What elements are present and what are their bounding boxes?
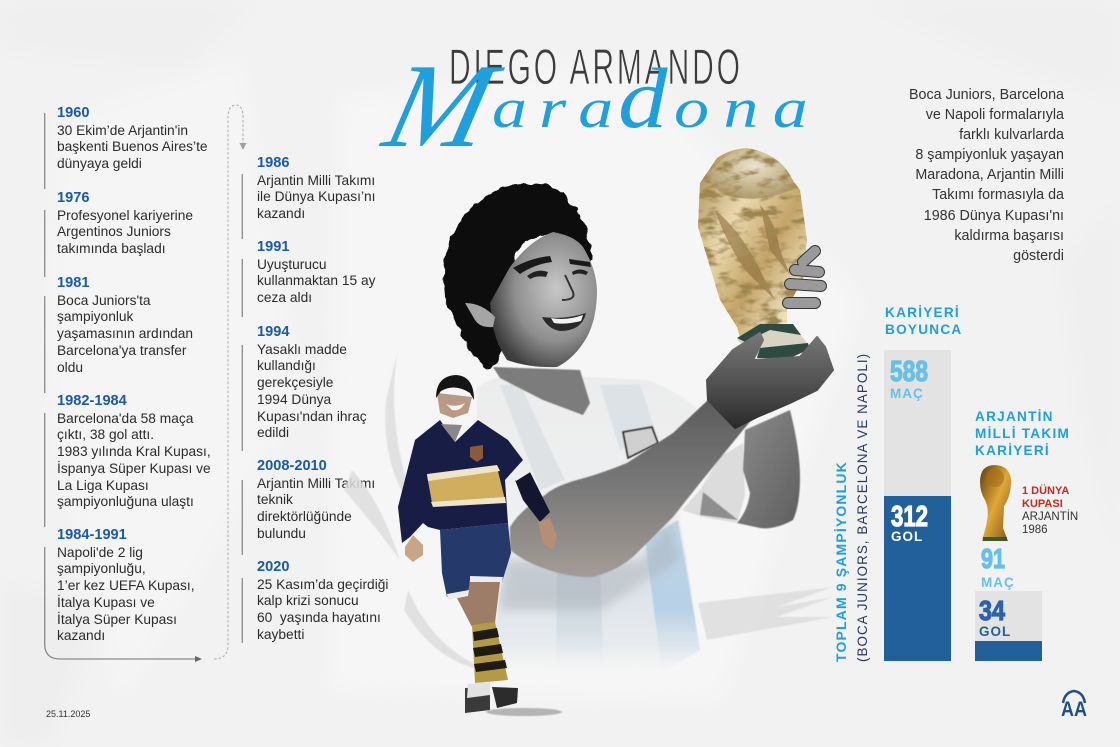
shadow bbox=[486, 708, 562, 716]
intro paragraph: Maradona, Arjantin Milli bbox=[915, 167, 1064, 183]
event 1994: kullandığı bbox=[257, 358, 316, 373]
value: 91 matches bbox=[981, 545, 1015, 590]
event 2008-2010: bulundu bbox=[257, 526, 306, 541]
vertical heading: total championships: TOPLAM 9 ŞAMPİYONLUK bbox=[833, 461, 849, 662]
big figure: hand bbox=[707, 333, 833, 428]
event 1981: Barcelona'ya transfer bbox=[57, 343, 186, 358]
event 1984-1991 bbox=[57, 527, 195, 643]
event 1976: 1976 bbox=[57, 190, 89, 206]
event 1982-1984 bbox=[57, 393, 211, 509]
event 2020: 60 yaşında hayatını bbox=[257, 610, 381, 625]
intro paragraph: Takımı formasıyla da bbox=[932, 187, 1064, 203]
value: 312 goals: GOL bbox=[891, 529, 923, 544]
big figure: far arm bbox=[682, 410, 800, 528]
title bbox=[371, 40, 808, 160]
event 1982-1984: Barcelona'da 58 maça bbox=[57, 410, 193, 426]
bar chart: national team totals bbox=[975, 591, 1042, 661]
event 1960 bbox=[57, 105, 208, 171]
event 1991: ceza aldı bbox=[257, 290, 312, 305]
event 2020: 2020 bbox=[257, 559, 289, 575]
timeline: right column bbox=[257, 155, 388, 642]
event 1982-1984: şampiyonluğuna ulaştı bbox=[57, 494, 194, 509]
intro paragraph: farklı kulvarlarda bbox=[959, 127, 1064, 143]
event 1981: şampiyonluk bbox=[57, 309, 133, 324]
intro paragraph: gösterdi bbox=[1013, 248, 1064, 264]
event 1976: Argentinos Juniors bbox=[57, 224, 171, 239]
intro paragraph: 8 şampiyonluk yaşayan bbox=[915, 147, 1064, 163]
event 1984-1991: 1’er kez UEFA Kupası, bbox=[57, 578, 195, 593]
event 2020: kaybetti bbox=[257, 627, 304, 642]
sock bbox=[472, 622, 508, 683]
event 1994: edildi bbox=[257, 425, 289, 440]
bar chart: career totals bbox=[884, 350, 951, 661]
event 1994: Kupası'ndan ihraç bbox=[257, 408, 367, 424]
event 1976: takımında başladı bbox=[57, 241, 166, 256]
boots bbox=[465, 687, 490, 713]
face bbox=[490, 232, 597, 367]
heading: career: BOYUNCA bbox=[885, 322, 962, 337]
event 1986 bbox=[257, 155, 375, 221]
event 1982-1984: İspanya Süper Kupası ve bbox=[57, 461, 211, 476]
big figure: fingers bbox=[788, 251, 821, 303]
event 1981: oldu bbox=[57, 360, 83, 374]
event 1984-1991: İtalya Süper Kupası bbox=[57, 612, 177, 626]
heading: national team career: KARİYERİ bbox=[975, 443, 1050, 458]
photo composite: Maradona with World Cup trophy bbox=[344, 148, 834, 716]
event 2020 bbox=[257, 559, 388, 642]
value: 312 goals: 312 bbox=[891, 501, 928, 533]
event 1984-1991: kazandı bbox=[57, 628, 105, 643]
leg bbox=[457, 582, 500, 627]
value: 588 matches: 588 bbox=[890, 356, 928, 388]
event 1991 bbox=[257, 239, 376, 305]
value: 588 matches: MAÇ bbox=[890, 386, 924, 401]
event 1986: kazandı bbox=[257, 206, 305, 221]
value: 34 goals: 34 bbox=[979, 595, 1005, 626]
event 1984-1991: 1984-1991 bbox=[57, 527, 127, 543]
event 2008-2010 bbox=[257, 458, 375, 541]
vertical subheading: clubs: (BOCA JUNIORS, BARCELONA VE NAPOLI) bbox=[855, 353, 870, 662]
event 1994: Yasaklı madde bbox=[257, 342, 347, 356]
arms bbox=[515, 472, 550, 522]
nose bbox=[562, 275, 574, 300]
title line: Maradona bbox=[371, 40, 808, 173]
event 1960: 1960 bbox=[57, 105, 89, 121]
trophy base bbox=[737, 324, 810, 358]
big figure: shirt bbox=[477, 377, 700, 675]
intro paragraph: ve Napoli formalarıyla bbox=[926, 107, 1064, 123]
event 2008-2010: Arjantin Milli Takımı bbox=[257, 476, 375, 490]
heading: national team career: MİLLİ TAKIM bbox=[975, 426, 1070, 441]
event 1986: Arjantin Milli Takımı bbox=[257, 172, 375, 188]
event 1991: 1991 bbox=[257, 239, 289, 255]
jersey bbox=[398, 420, 523, 543]
small figure: Boca player bbox=[398, 375, 562, 716]
event 1976: Profesyonel kariyerine bbox=[57, 208, 193, 222]
bar segment: 312 goals bbox=[884, 496, 951, 661]
event 2008-2010: teknik bbox=[257, 492, 293, 507]
shadow under arm bbox=[500, 520, 680, 610]
big figure: head bbox=[447, 186, 597, 367]
event 1986: 1986 bbox=[257, 155, 289, 171]
callout: 1 World Cup bbox=[1022, 484, 1078, 536]
event 1981: 1981 bbox=[57, 275, 89, 291]
value: 588 matches bbox=[890, 356, 928, 401]
intro paragraph: kaldırma başarısı bbox=[954, 228, 1064, 244]
heading: national team career bbox=[975, 409, 1070, 458]
heading: career: KARİYERİ bbox=[885, 305, 960, 320]
ear bbox=[465, 303, 495, 327]
intro paragraph bbox=[909, 87, 1064, 264]
value: 312 goals bbox=[891, 501, 928, 544]
event 1981: Boca Juniors'ta bbox=[57, 292, 151, 308]
heading: national team career: ARJANTİN bbox=[975, 409, 1054, 424]
icon: Anadolu Agency logo bbox=[1061, 690, 1087, 718]
brush strokes bbox=[344, 350, 833, 672]
heading: career bbox=[885, 305, 962, 337]
callout: 1 World Cup: KUPASI bbox=[1022, 498, 1063, 510]
value: 34 goals bbox=[979, 595, 1011, 639]
event 1991: Uyuşturucu bbox=[257, 256, 327, 272]
badge bbox=[623, 427, 658, 458]
event 1984-1991: Napoli'de 2 lig bbox=[57, 544, 143, 560]
title line: Maradona: d bbox=[618, 51, 668, 146]
event 2020: kalp krizi sonucu bbox=[257, 593, 359, 608]
event 1982-1984: La Liga Kupası bbox=[57, 478, 149, 492]
callout: 1 World Cup: 1 DÜNYA bbox=[1022, 485, 1069, 497]
event 1960: 30 Ekim’de Arjantin'in bbox=[57, 122, 188, 138]
shorts bbox=[440, 523, 511, 597]
event 1984-1991: İtalya Kupası ve bbox=[57, 595, 155, 610]
title line: Maradona: ona bbox=[674, 78, 808, 139]
event 2020: 25 Kasım’da geçirdiği bbox=[257, 576, 388, 592]
event 1984-1991: şampiyonluğu, bbox=[57, 561, 146, 576]
event 1994: gerekçesiyle bbox=[257, 375, 333, 390]
intro paragraph: Boca Juniors, Barcelona bbox=[909, 87, 1064, 103]
event 1994: 1994 Dünya bbox=[257, 392, 331, 407]
trophy bbox=[698, 148, 807, 337]
event 1994: 1994 bbox=[257, 324, 289, 340]
event 1982-1984: 1983 yılında Kral Kupası, bbox=[57, 444, 211, 459]
head bbox=[437, 393, 472, 418]
event 1994 bbox=[257, 324, 367, 440]
big figure: neck bbox=[493, 367, 590, 415]
smile bbox=[542, 313, 586, 331]
title line: Diego Armando: DIEGO ARMANDO bbox=[449, 40, 740, 95]
event 1982-1984: 1982-1984 bbox=[57, 393, 127, 409]
event 1991: kullanmaktan 15 ay bbox=[257, 273, 375, 288]
intro paragraph: 1986 Dünya Kupası'nı bbox=[924, 208, 1064, 224]
icon: small World Cup trophy bbox=[980, 465, 1012, 541]
event 1960: dünyaya geldi bbox=[57, 156, 142, 171]
event 1976 bbox=[57, 190, 193, 256]
event 1960: başkenti Buenos Aires’te bbox=[57, 139, 208, 154]
timeline: left column bbox=[57, 105, 211, 643]
event 1981 bbox=[57, 275, 193, 374]
event 2008-2010: 2008-2010 bbox=[257, 458, 327, 474]
hair bbox=[447, 186, 590, 367]
eyes and brows bbox=[513, 256, 591, 274]
date: 25.11.2025 bbox=[46, 709, 90, 719]
callout: 1 World Cup: 1986 bbox=[1022, 524, 1048, 536]
big figure: near arm bbox=[510, 400, 760, 577]
value: 91 matches: MAÇ bbox=[981, 575, 1015, 590]
title line: Maradona: ara bbox=[492, 78, 613, 139]
timeline connector lines bbox=[44, 104, 246, 662]
value: 34 goals: GOL bbox=[979, 624, 1011, 639]
callout: 1 World Cup: ARJANTİN bbox=[1022, 511, 1078, 523]
event 2008-2010: direktörlüğünde bbox=[257, 509, 352, 524]
event 1982-1984: çıktı, 38 gol attı. bbox=[57, 427, 154, 442]
event 1986: ile Dünya Kupası’nı bbox=[257, 189, 375, 204]
bar segment: 34 goals bbox=[975, 641, 1042, 661]
event 1981: yaşamasının ardından bbox=[57, 326, 193, 341]
